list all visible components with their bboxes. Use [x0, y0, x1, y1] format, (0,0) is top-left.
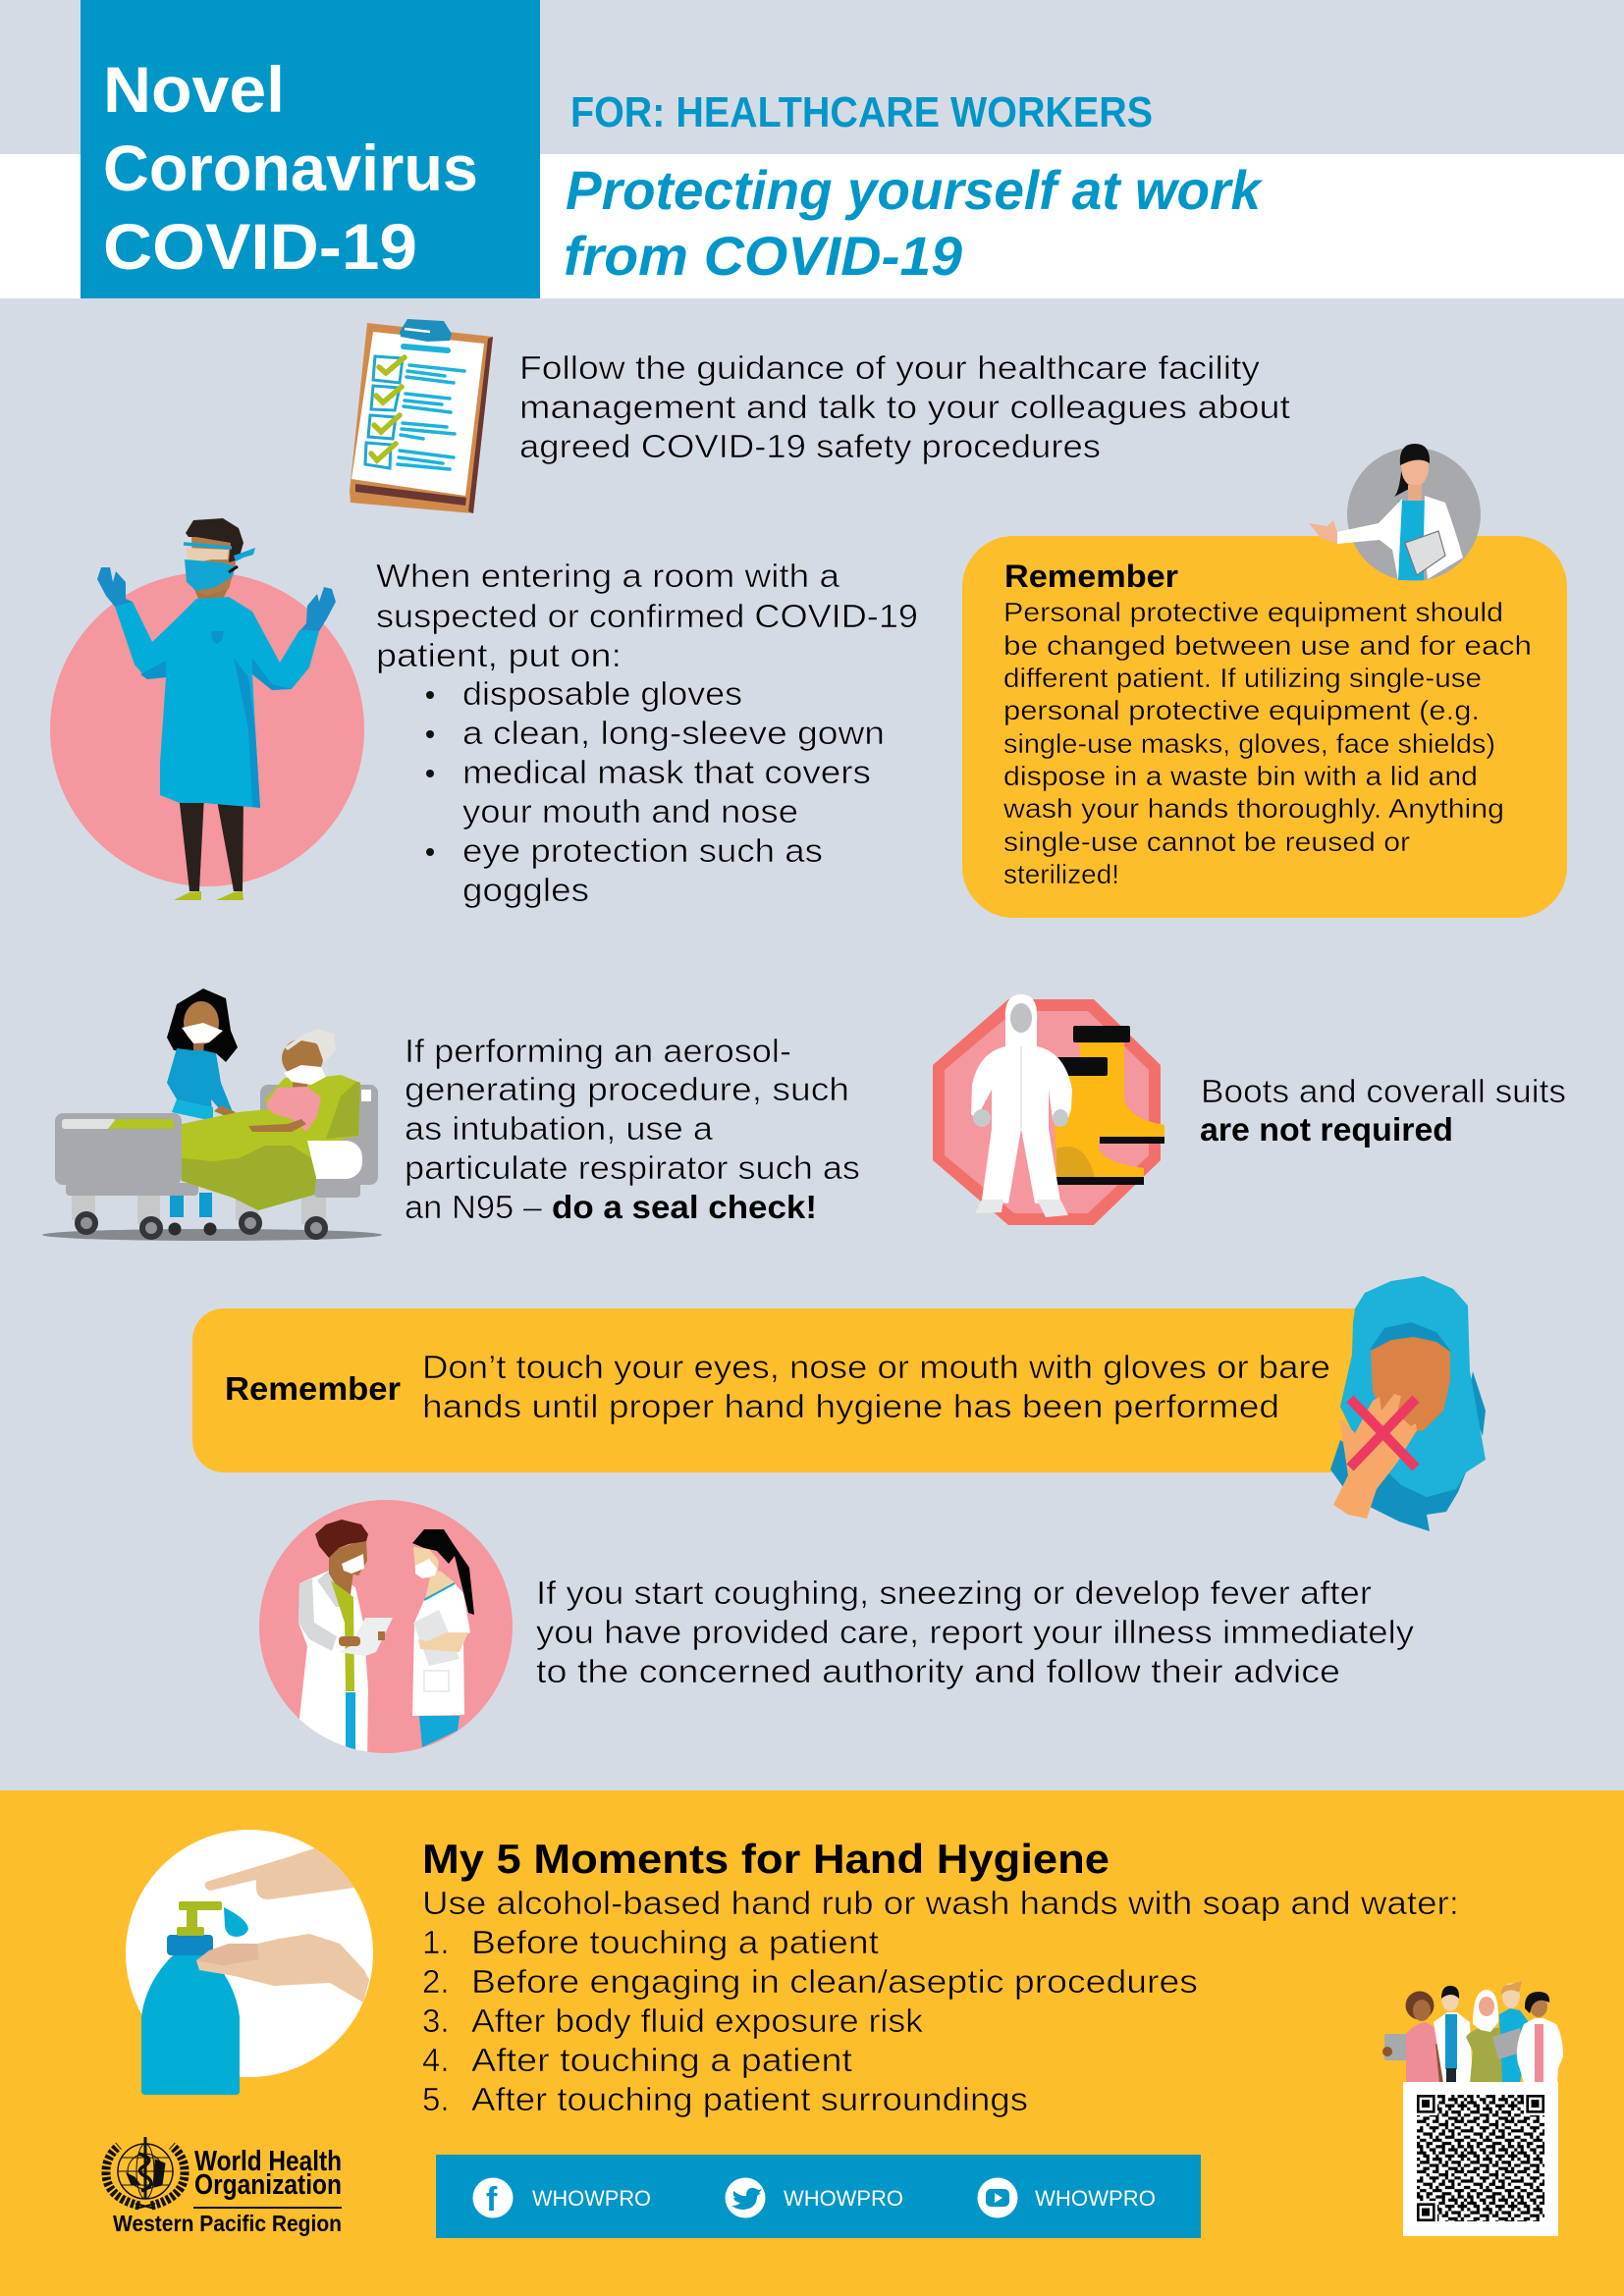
bed legs [72, 1193, 326, 1224]
header white band [0, 154, 1624, 298]
left bed panel [55, 1113, 182, 1185]
illustration: two masked doctors talking [259, 1500, 513, 1767]
nurse legs [170, 1193, 184, 1217]
sheet behind patient [265, 1075, 360, 1141]
illustration: team of health workers [1382, 1981, 1563, 2083]
subtitle [564, 159, 1264, 287]
neck [193, 587, 229, 601]
logo: World Health Organization: Western Pacific Region [113, 2211, 342, 2236]
text: what to put on: your mouth and nose [462, 793, 798, 829]
subtitle: Protecting yourself at work [566, 159, 1264, 221]
right doctor [412, 1583, 470, 1716]
headboard [260, 1085, 378, 1185]
icon: facebook: f [486, 2181, 498, 2218]
text: aerosol-generating procedure [405, 1033, 860, 1225]
panel: remember protective equipment: different patient. If utilizing single-use [1003, 663, 1482, 693]
panel: remember protective equipment: single-use cannot be reused or [1003, 827, 1410, 857]
patient [293, 1078, 307, 1094]
illustration: woman in hijab with crossed hand [1330, 1276, 1486, 1531]
person: blue scrubs [1499, 1981, 1529, 2083]
subtitle: from COVID-19 [564, 225, 962, 287]
gloves [97, 567, 133, 607]
text: what to put on: disposable gloves [462, 675, 742, 712]
title block: Novel [103, 53, 285, 126]
logo: World Health Organization: Organization [194, 2169, 342, 2201]
text: five moments list: 5. [422, 2081, 450, 2117]
text: what to put on: suspected or confirmed COVID-19 [376, 598, 918, 634]
panel: remember protective equipment: single-use masks, gloves, face shields) [1003, 728, 1495, 759]
panel: remember protective equipment [962, 444, 1567, 918]
text: aerosol-generating procedure: an N95 – [405, 1189, 543, 1225]
person: white coat pink shirt [1517, 1992, 1563, 2083]
blanket [182, 1109, 316, 1210]
person: hijab green dress [1466, 1990, 1524, 2083]
text: what to put on: medical mask that covers [462, 754, 871, 790]
gown [115, 597, 319, 808]
text: report illness [536, 1575, 1415, 1689]
head [191, 537, 236, 596]
text: aerosol-generating procedure: If performing an aerosol- [405, 1033, 791, 1069]
text: follow guidance: Follow the guidance of your healthcare facility [519, 349, 1261, 386]
social media bar: WHOWPRO [784, 2186, 903, 2211]
text: what to put on: When entering a room with a [376, 558, 840, 594]
person: white coat blue shirt [1434, 1986, 1473, 2083]
social media bar [436, 2155, 1201, 2238]
boots [1079, 1042, 1164, 1137]
text: five moments list: 1. [422, 1924, 450, 1960]
finder marks [1417, 2095, 1544, 2221]
QR code [1403, 2082, 1558, 2236]
text: follow guidance [519, 349, 1290, 464]
illustration: doctor with clipboard [1309, 444, 1481, 581]
text: follow guidance: agreed COVID-19 safety procedures [519, 428, 1101, 464]
illustration: sanitizer bottle and hands [126, 1830, 373, 2095]
panel: remember protective equipment: sterilized! [1003, 859, 1119, 889]
text: five moments list: After touching a patient [471, 2042, 852, 2078]
audience heading: FOR: HEALTHCARE WORKERS [570, 88, 1153, 136]
person: pink scrubs [1382, 1991, 1448, 2083]
text: five moments list: Use alcohol-based hand rub or wash hands with soap and water: [422, 1885, 1459, 1921]
panel: remember protective equipment: dispose in a waste bin with a lid and [1003, 761, 1478, 791]
panel: remember hand hygiene: hands until proper hand hygiene has been performed [422, 1388, 1279, 1424]
left doctor [298, 1571, 368, 1767]
text: aerosol-generating procedure: particulate respirator such as [405, 1149, 860, 1186]
text: aerosol-generating procedure: as intubation, use a [405, 1110, 714, 1147]
booties [975, 1200, 1003, 1213]
text: boots and coveralls: Boots and coverall suits [1201, 1073, 1566, 1109]
text: five moments list: 4. [422, 2042, 450, 2078]
nurse [167, 988, 238, 1062]
icon: clipboard checklist [350, 319, 493, 513]
text: boots and coveralls [1200, 1073, 1566, 1148]
heading: hand hygiene: My 5 Moments for Hand Hygiene [422, 1836, 1110, 1882]
text: what to put on: goggles [462, 872, 589, 908]
text: boots and coveralls: are not required [1200, 1111, 1453, 1148]
panel: remember hand hygiene: Remember [225, 1370, 401, 1407]
text: what to put on: patient, put on: [376, 637, 622, 673]
text: report illness: If you start coughing, sneezing or develop fever after [536, 1575, 1372, 1611]
social media bar: WHOWPRO [1035, 2186, 1156, 2211]
text: five moments list: After body fluid exposure risk [471, 2002, 924, 2039]
panel: remember protective equipment: be changed between use and for each [1003, 630, 1532, 661]
icon: youtube [978, 2177, 1017, 2218]
illustration: health worker in protective gown [50, 518, 364, 900]
panel: remember protective equipment: Remember [1004, 559, 1178, 594]
icon: twitter [725, 2177, 766, 2218]
text: five moments list: 3. [422, 2002, 450, 2039]
text: five moments list: Before engaging in clean/aseptic procedures [471, 1963, 1198, 2000]
text: five moments list [422, 1885, 1459, 2117]
text: what to put on: eye protection such as [462, 832, 823, 869]
suit [971, 994, 1072, 1203]
illustration: nurse and patient in bed [42, 988, 382, 1241]
text: report illness: to the concerned authority and follow their advice [536, 1653, 1340, 1689]
title block: COVID-19 [103, 210, 417, 283]
icon: crossed-out coverall suit and boots [933, 994, 1164, 1225]
logo: World Health Organization [106, 2137, 342, 2236]
icon: WHO emblem [106, 2137, 185, 2209]
wheels [78, 1214, 325, 1237]
social media bar: WHOWPRO [532, 2186, 651, 2211]
panel: remember hand hygiene [192, 1308, 1390, 1472]
logo: World Health Organization: World Health [194, 2146, 342, 2177]
panel: remember hand hygiene: Don’t touch your eyes, nose or mouth with gloves or bare [422, 1349, 1330, 1385]
title block [81, 0, 540, 298]
panel: bottom hand hygiene band [0, 1790, 1624, 2296]
text: aerosol-generating procedure: do a seal check! [552, 1189, 817, 1225]
panel: remember protective equipment: Personal protective equipment should [1003, 597, 1503, 627]
text: what to put on: a clean, long-sleeve gown [462, 715, 885, 751]
icon: facebook [473, 2177, 513, 2218]
title block: Coronavirus [103, 132, 478, 204]
text: five moments list: 2. [422, 1963, 450, 2000]
text: five moments list: Before touching a patient [471, 1924, 879, 1960]
gloves [973, 1109, 991, 1127]
text: report illness: you have provided care, report your illness immediately [536, 1614, 1415, 1650]
text: follow guidance: management and talk to your colleagues about [519, 389, 1290, 425]
text: aerosol-generating procedure: generating procedure, such [405, 1071, 849, 1107]
panel: remember protective equipment: personal protective equipment (e.g. [1003, 695, 1480, 725]
text: what to put on [376, 558, 918, 908]
text: five moments list: After touching patient surroundings [471, 2081, 1028, 2117]
panel: remember protective equipment: wash your hands thoroughly. Anything [1002, 793, 1504, 824]
legs [179, 795, 204, 891]
